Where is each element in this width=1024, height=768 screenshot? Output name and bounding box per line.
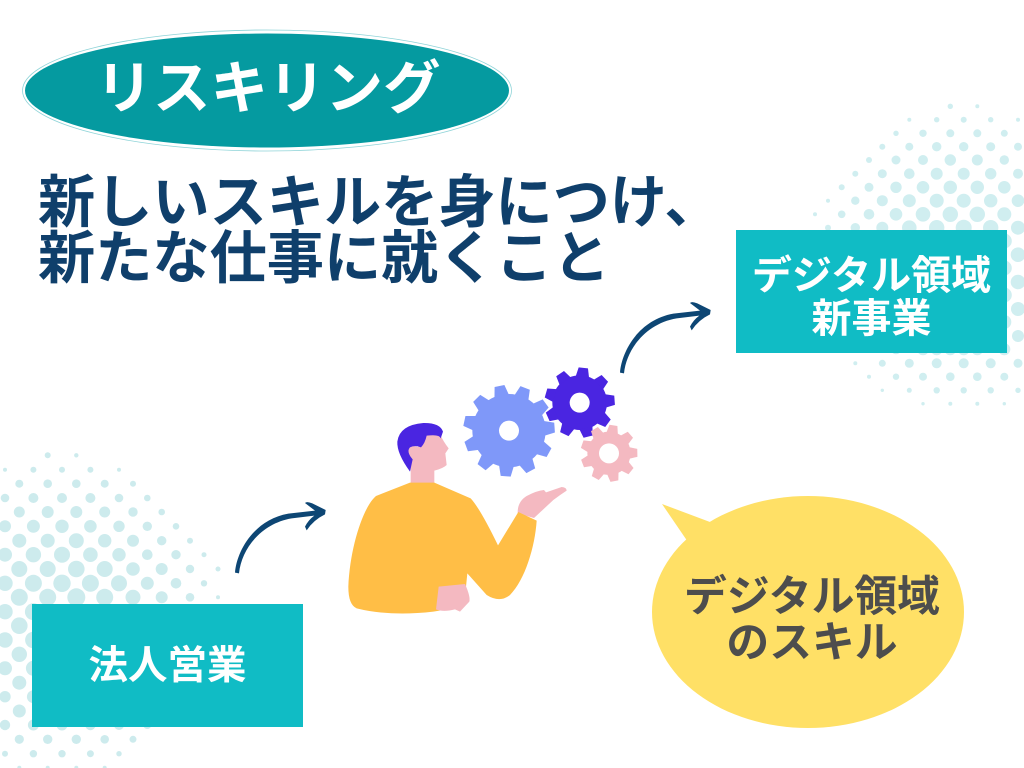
gear: purple: [544, 367, 615, 438]
box: 法人営業: 法人営業: [88, 644, 246, 688]
speech bubble: デジタル領域: [684, 573, 940, 621]
person: hair: [397, 423, 443, 472]
person: open hand: [518, 487, 567, 518]
headline: [38, 171, 721, 291]
headline: 新たな仕事に就くこと: [38, 227, 610, 291]
gear: blue: [463, 384, 555, 477]
person: resting hand: [436, 584, 470, 612]
person: yellow sweater: [348, 483, 537, 614]
box: デジタル領域 新事業: 新事業: [812, 297, 932, 341]
arrow: person to new business: [620, 302, 711, 374]
title: リスキリング oval: [22, 30, 512, 152]
speech bubble: のスキル: [726, 619, 898, 667]
speech bubble: [652, 496, 964, 728]
gear: pink: [580, 424, 637, 482]
box: デジタル領域 新事業: デジタル領域: [752, 254, 991, 298]
box: デジタル領域 新事業: [736, 230, 1007, 353]
illustration: person with gears: [348, 367, 638, 614]
box: 法人営業: [32, 604, 303, 727]
person: head and neck: [407, 434, 449, 484]
arrow: sales to person: [235, 502, 326, 574]
headline: 新しいスキルを身につけ、: [38, 171, 721, 235]
title: リスキリング oval: リスキリング: [96, 57, 440, 121]
